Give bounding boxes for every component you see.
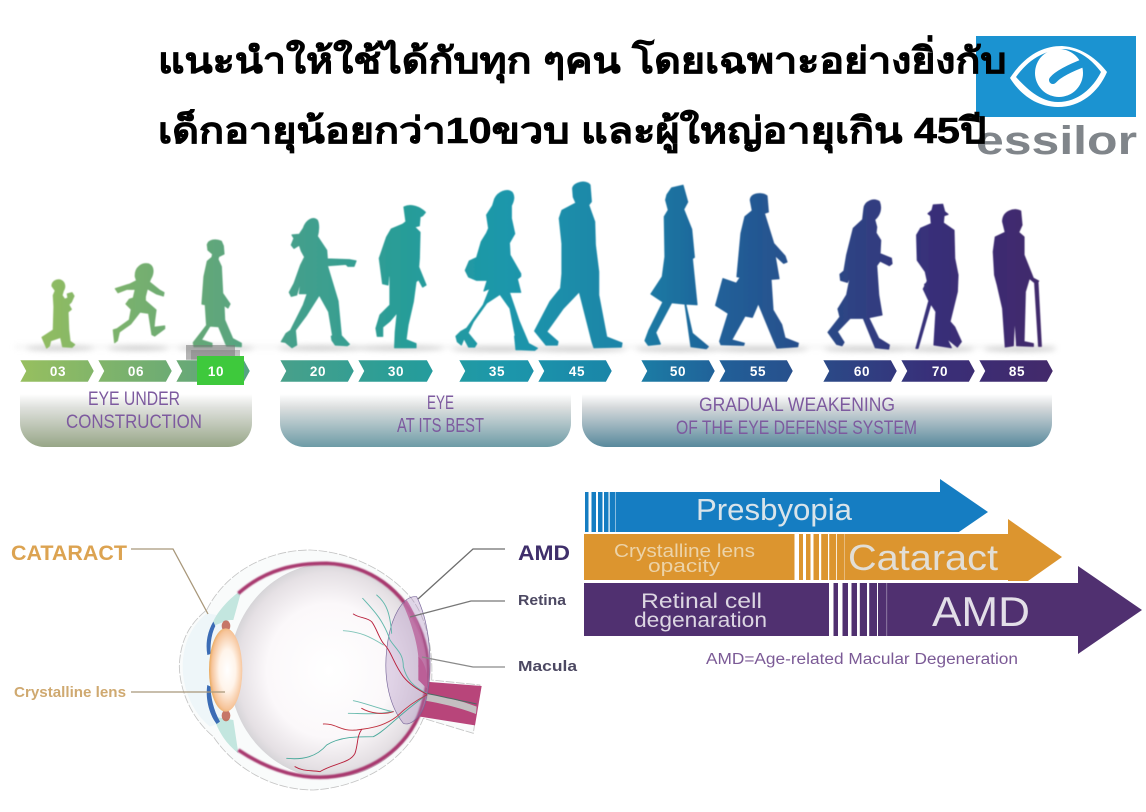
panel: gradual weakening: OF THE EYE DEFENSE SYSTEM [676, 418, 917, 439]
age labels: 03 [50, 364, 66, 379]
arrow: presbyopia [585, 479, 988, 545]
silhouette: man with cane age 70 [916, 204, 961, 348]
age labels: 30 [388, 364, 404, 379]
title: แนะนำให้ใช้ได้กับทุก ๆคน โดยเฉพาะอย่างยิ่งกับ [158, 35, 1007, 83]
logo: Essilor: essilor [976, 119, 1137, 163]
leader lines [131, 549, 505, 692]
title: เด็กอายุน้อยกว่า10ขวบ และผู้ใหญ่อายุเกิน 45ปี [158, 109, 986, 153]
retinal vessels [287, 595, 427, 772]
arrow: AMD: AMD [932, 588, 1030, 635]
crystalline lens [209, 628, 242, 712]
age labels: 50 [670, 364, 686, 379]
silhouette: man age 30 [376, 206, 426, 348]
arrow: AMD [584, 566, 1142, 654]
silhouette: toddler age 3 [42, 280, 75, 348]
panel: eye under construction: CONSTRUCTION [66, 412, 202, 433]
label: cataract: CATARACT [11, 542, 127, 565]
ciliary body [222, 620, 230, 721]
panel: gradual weakening: GRADUAL WEAKENING [699, 395, 895, 416]
silhouette: man with briefcase age 55 [716, 194, 798, 348]
label: crystalline lens: Crystalline lens [14, 684, 126, 701]
iris top [207, 622, 215, 655]
age labels: 85 [1009, 364, 1025, 379]
silhouettes: ages 03 to 85 [42, 182, 1041, 350]
panel: eye at its best: AT ITS BEST [397, 415, 484, 437]
silhouette: woman with cane age 85 [993, 210, 1041, 347]
age labels: 35 [489, 364, 505, 379]
highlighted age 10 box [197, 356, 244, 385]
grey marker squares behind age 10 [186, 345, 240, 376]
age labels: 06 [128, 364, 144, 379]
silhouette: man age 45 [535, 182, 622, 348]
age labels: 20 [310, 364, 326, 379]
cornea tint [183, 613, 228, 727]
arrow: cataract: Crystalline lens [614, 540, 755, 561]
eye anatomy diagram [179, 550, 482, 790]
label: AMD: AMD [518, 542, 570, 565]
arrow: cataract: Cataract [848, 537, 998, 578]
silhouette: woman age 50 [645, 185, 708, 349]
arrow: presbyopia: Presbyopia [696, 493, 852, 527]
label: macula: Macula [518, 658, 578, 675]
age labels: 60 [854, 364, 870, 379]
age labels [50, 364, 1025, 379]
age labels: 10 [208, 364, 224, 379]
eye outer sheath [179, 550, 480, 790]
panel: eye at its best [280, 393, 571, 447]
arrow: AMD: degenaration [634, 609, 767, 632]
silhouette: woman age 60 [828, 200, 892, 349]
age labels: 55 [750, 364, 766, 379]
panel: eye under construction [20, 389, 252, 447]
footnote: AMD definition: AMD=Age-related Macular Degeneration [706, 651, 1018, 668]
silhouette: woman age 35 [456, 191, 537, 350]
amd highlighted area [386, 597, 430, 724]
panel: gradual weakening [582, 394, 1052, 447]
logo: Essilor [976, 36, 1137, 163]
label: retina: Retina [518, 592, 567, 609]
arrow: cataract [584, 519, 1062, 595]
iris bottom [207, 685, 220, 724]
silhouette: woman age 20 [281, 219, 356, 348]
thick retina zone [403, 600, 427, 680]
age chevrons [20, 360, 1053, 382]
age labels: 45 [569, 364, 585, 379]
ground shadows [15, 346, 1056, 352]
teal band behind lens [212, 590, 242, 753]
silhouette: boy age 10 [193, 240, 241, 347]
panel: eye at its best: EYE [427, 393, 454, 414]
age labels: 70 [932, 364, 948, 379]
arrow: cataract: opacity [648, 555, 721, 576]
title [158, 35, 1007, 153]
silhouette: running child age 6 [113, 264, 165, 343]
sclera red band [238, 563, 428, 777]
eyeball interior [229, 563, 429, 778]
optic nerve [420, 682, 482, 725]
panel: eye under construction: EYE UNDER [88, 389, 180, 410]
arrow: AMD: Retinal cell [641, 590, 762, 613]
